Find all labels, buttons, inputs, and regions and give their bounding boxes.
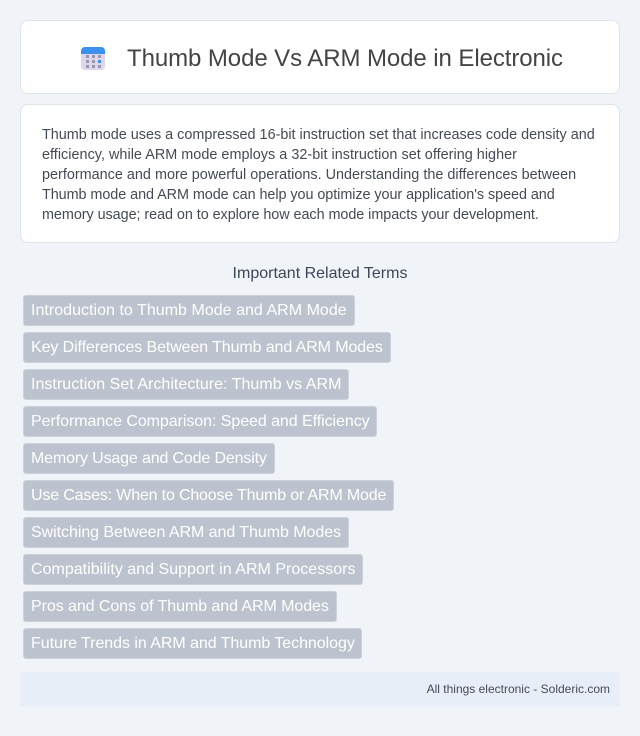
term tags: Performance Comparison: Speed and Efficiency bbox=[31, 413, 370, 430]
intro text: Thumb mode and ARM mode can help you optimize your application's speed and bbox=[42, 187, 555, 203]
term tags: Introduction to Thumb Mode and ARM Mode bbox=[31, 302, 347, 319]
term tags: Pros and Cons of Thumb and ARM Modes bbox=[31, 598, 329, 615]
intro panel bbox=[20, 104, 620, 243]
term tags bbox=[23, 295, 394, 659]
term tags: Memory Usage and Code Density bbox=[31, 450, 267, 467]
footer: All things electronic - Solderic.com bbox=[427, 682, 610, 696]
intro text: memory usage; read on to explore how each mode impacts your development. bbox=[42, 207, 539, 223]
term tags: Use Cases: When to Choose Thumb or ARM Mode bbox=[31, 487, 386, 504]
intro text: Thumb mode uses a compressed 16-bit instruction set that increases code density and bbox=[42, 127, 595, 143]
intro text bbox=[42, 127, 595, 223]
title: Thumb Mode Vs ARM Mode in Electronic bbox=[127, 45, 563, 72]
icon: calendar bbox=[81, 47, 105, 70]
term tags: Future Trends in ARM and Thumb Technology bbox=[31, 635, 355, 652]
term tags: Key Differences Between Thumb and ARM Modes bbox=[31, 339, 383, 356]
intro text: performance and more powerful operations. Understanding the differences between bbox=[42, 167, 576, 183]
term tags: Compatibility and Support in ARM Processors bbox=[31, 561, 356, 578]
section heading: Important Related Terms bbox=[233, 265, 407, 282]
intro text: efficiency, while ARM mode employs a 32-bit instruction set offering higher bbox=[42, 147, 517, 163]
term tags: Instruction Set Architecture: Thumb vs ARM bbox=[31, 376, 341, 393]
footer bbox=[20, 672, 620, 706]
header panel bbox=[20, 20, 620, 94]
term tags: Switching Between ARM and Thumb Modes bbox=[31, 524, 341, 541]
